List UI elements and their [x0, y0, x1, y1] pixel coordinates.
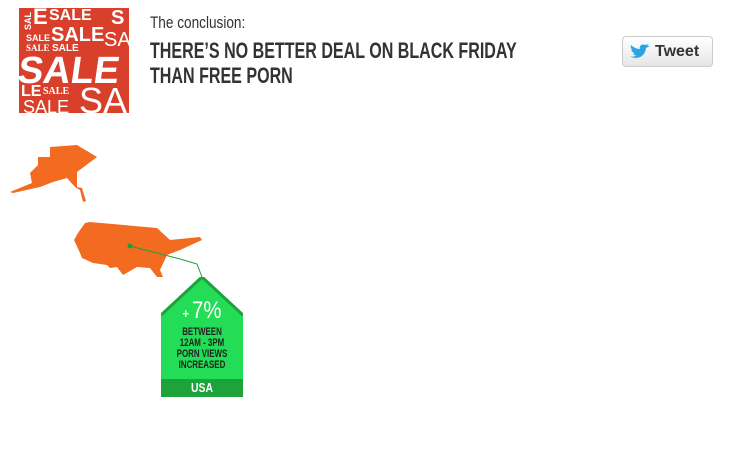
title: THAN FREE PORN [150, 63, 293, 88]
usa mainland [74, 222, 202, 277]
icon: sale image: SALE [26, 33, 50, 43]
tweet button: Tweet [655, 43, 699, 60]
icon: sale image: SALE [52, 43, 79, 54]
tweet button [622, 36, 713, 67]
label: USA [191, 380, 213, 395]
description: PORN VIEWS [177, 348, 227, 360]
description: BETWEEN [182, 326, 222, 338]
icon: twitter bird [630, 44, 650, 58]
subtitle: The conclusion: [150, 13, 245, 32]
description: 12AM - 3PM [180, 337, 224, 349]
alaska [10, 145, 97, 202]
icon: sale image: LE [21, 83, 42, 100]
connector line [130, 246, 202, 277]
value: + 7% [182, 297, 222, 324]
icon: sale image: SALE [43, 86, 69, 97]
title [150, 38, 517, 88]
icon: sale image: SALE [26, 43, 50, 53]
icon: sale image: SAL [23, 11, 33, 30]
icon: sale image [19, 8, 129, 113]
description: INCREASED [179, 359, 225, 371]
icon: sale image: SALE [51, 24, 104, 46]
callout tag: usa [161, 277, 243, 397]
description [177, 326, 227, 371]
title: THERE’S NO BETTER DEAL ON BLACK FRIDAY [150, 38, 517, 63]
